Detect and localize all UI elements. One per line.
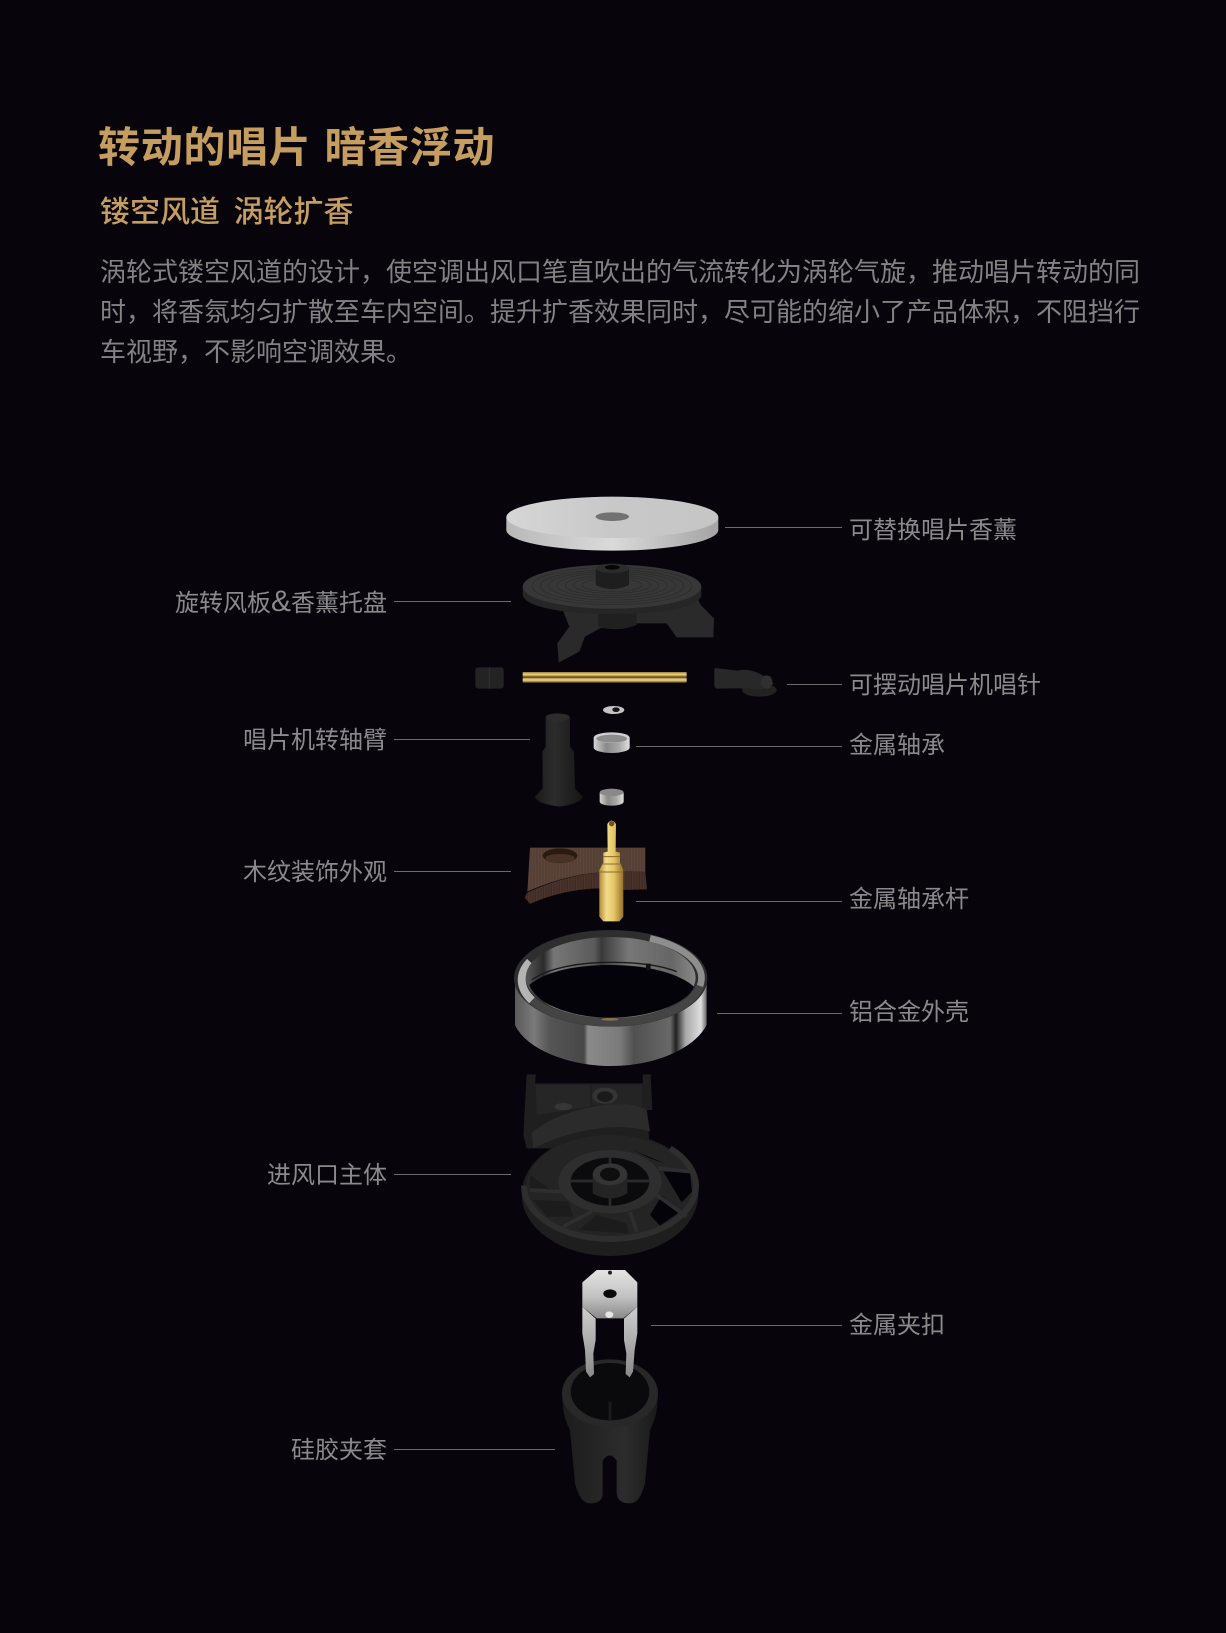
description text: 车视野，不影响空调效果。 [100,337,412,367]
label: wood grain: 木纹装饰外观 [243,859,387,886]
part: metal bearing [594,732,630,753]
label: pivot arm: 唱片机转轴臂 [243,727,387,754]
part: aluminum alloy shell [514,930,707,1066]
part: rotating vane and fragrance tray [523,564,714,663]
title: 转动的唱片 暗香浮动 [98,124,495,171]
label: metal bearing: 金属轴承 [849,732,945,759]
label: swinging needle: 可摆动唱片机唱针 [849,672,1041,699]
part: wood grain decorative panel [525,848,647,904]
part: swinging tonearm needle [475,667,777,697]
label: metal clip: 金属夹扣 [849,1312,945,1339]
part: air inlet body [522,1074,698,1256]
subtitle: 镂空风道 涡轮扩香 [100,196,353,229]
part: replaceable record fragrance disk [506,497,718,551]
label: silicone sleeve: 硅胶夹套 [291,1437,387,1464]
label: rotating vane and tray: 旋转风板&香薰托盘 [175,585,387,618]
part: metal clip [582,1270,637,1377]
label: aluminum shell: 铝合金外壳 [849,999,969,1026]
label: air inlet body: 进风口主体 [267,1162,387,1189]
part: washer [603,706,624,714]
part: tonearm pivot arm [535,713,583,807]
part: metal bearing rod [599,821,623,921]
description text: 时，将香氛均匀扩散至车内空间。提升扩香效果同时，尽可能的缩小了产品体积，不阻挡行 [100,297,1140,327]
description text: 涡轮式镂空风道的设计，使空调出风口笔直吹出的气流转化为涡轮气旋，推动唱片转动的同 [100,257,1140,287]
part: silicone sleeve [562,1359,658,1503]
label: bearing rod: 金属轴承杆 [849,886,969,913]
label: replaceable fragrance disk: 可替换唱片香薰 [849,517,1017,544]
description text [100,257,1140,367]
part: small bearing [600,789,624,806]
